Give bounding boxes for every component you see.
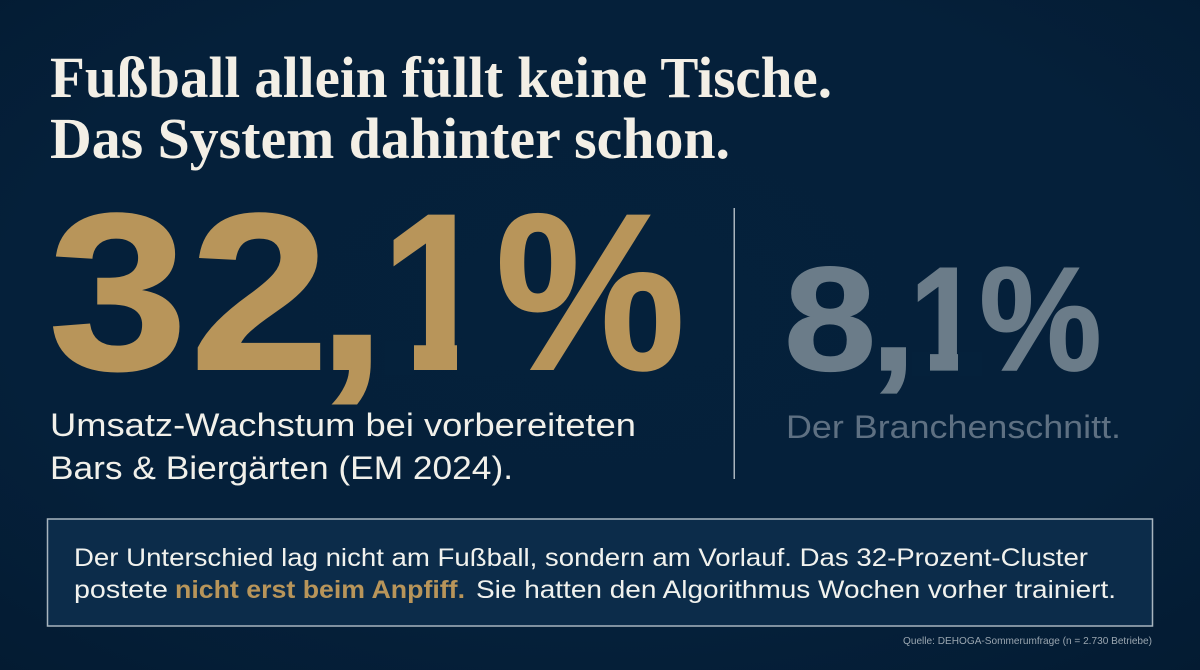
main statistic: 32,1%: 32, bbox=[48, 168, 386, 417]
main statistic: 32,1% bbox=[48, 167, 685, 417]
comparison statistic: 8,1%: % bbox=[979, 237, 1102, 402]
main statistic caption: Umsatz-Wachstum bei vorbereiteten bbox=[50, 407, 636, 443]
comparison statistic: 8,1%: 8, bbox=[784, 237, 916, 402]
callout text: postete bbox=[74, 576, 168, 604]
main statistic: 32,1%: 1 bbox=[381, 167, 490, 417]
title: Fußball allein füllt keine Tische. bbox=[50, 45, 832, 110]
title bbox=[50, 45, 832, 171]
callout box bbox=[48, 519, 1152, 626]
comparison statistic: 8,1% bbox=[784, 237, 1102, 402]
callout text: Sie hatten den Algorithmus Wochen vorher trainiert. bbox=[476, 576, 1116, 604]
callout text: Der Unterschied lag nicht am Fußball, sondern am Vorlauf. Das 32-Prozent-Cluster bbox=[74, 544, 1088, 572]
callout text bbox=[74, 544, 1116, 604]
main statistic caption: Bars & Biergärten (EM 2024). bbox=[50, 450, 513, 486]
title: Das System dahinter schon. bbox=[50, 106, 730, 171]
comparison caption: Der Branchenschnitt. bbox=[786, 409, 1121, 445]
source note: Quelle: DEHOGA-Sommerumfrage (n = 2.730 Betriebe) bbox=[903, 635, 1152, 647]
callout text: nicht erst beim Anpfiff. bbox=[175, 576, 465, 604]
main statistic: 32,1%: % bbox=[496, 169, 685, 417]
comparison statistic: 8,1%: 1 bbox=[910, 237, 980, 402]
main statistic caption bbox=[50, 407, 636, 486]
